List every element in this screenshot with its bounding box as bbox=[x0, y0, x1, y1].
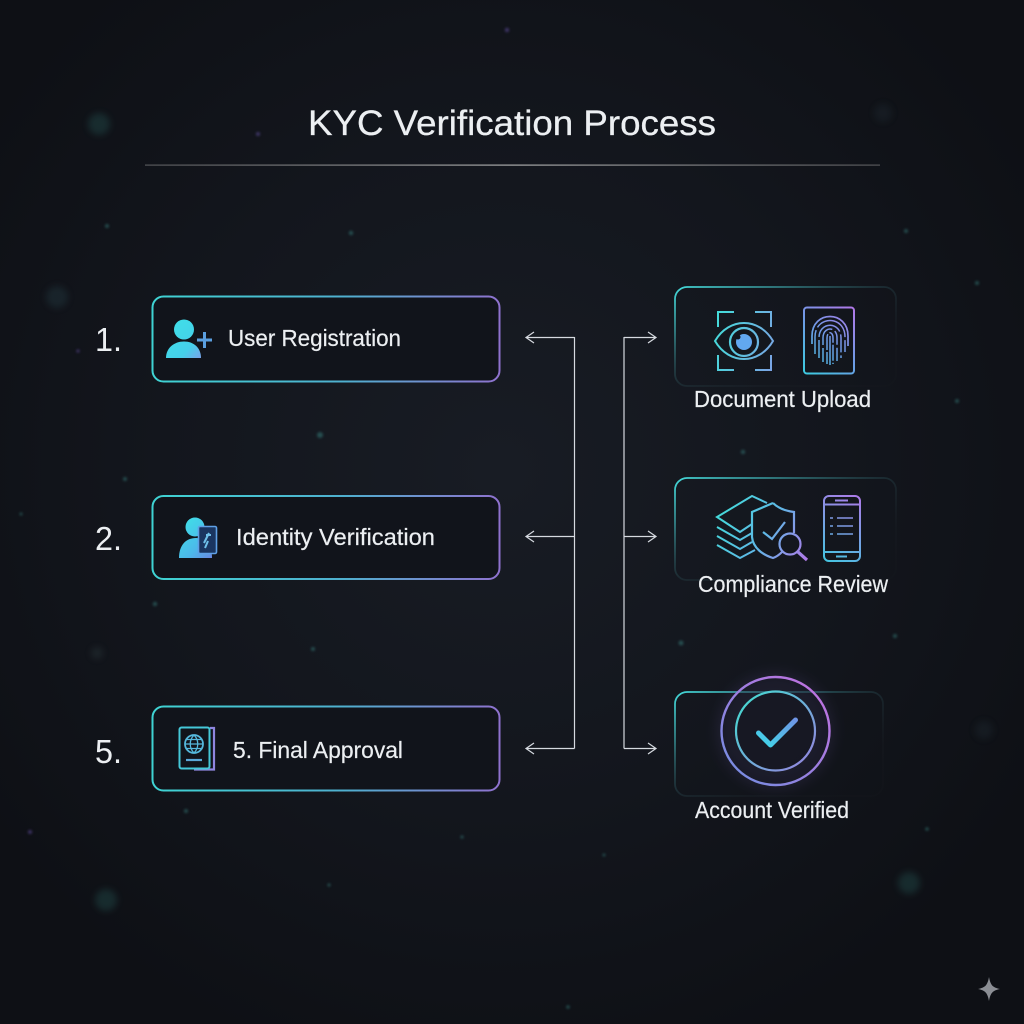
icon: phone bbox=[824, 496, 860, 561]
label: user registration: User Registration bbox=[228, 325, 401, 351]
icon: document stack bbox=[717, 496, 767, 558]
label: identity verification: Identity Verification bbox=[236, 524, 435, 550]
panel: identity verification bbox=[152, 496, 500, 579]
label: document upload: Document Upload bbox=[694, 386, 871, 412]
panel: user registration bbox=[152, 296, 500, 382]
arrows: right connector bbox=[624, 332, 656, 754]
step number 5: 5. bbox=[95, 733, 122, 770]
icon: identity card bbox=[179, 518, 216, 558]
panel: compliance review bbox=[675, 478, 896, 597]
panel: document upload bbox=[675, 287, 896, 412]
label: compliance review: Compliance Review bbox=[698, 571, 888, 597]
icon: sparkle watermark bbox=[978, 977, 1000, 1001]
icon: verified badge bbox=[718, 673, 834, 789]
step number 2: 2. bbox=[95, 520, 122, 557]
title: KYC Verification Process bbox=[308, 104, 716, 143]
title divider bbox=[145, 164, 880, 166]
panel: account verified bbox=[675, 673, 883, 823]
label: account verified: Account Verified bbox=[695, 797, 849, 823]
icon: shield with check and magnifier bbox=[752, 503, 807, 560]
icon: user plus bbox=[166, 320, 212, 358]
icon: eye scan bbox=[715, 312, 773, 370]
panel: final approval bbox=[152, 706, 500, 790]
icon: fingerprint tablet bbox=[804, 308, 854, 374]
arrows: left connector bbox=[526, 332, 574, 754]
step number 1: 1. bbox=[95, 321, 122, 358]
label: final approval: 5. Final Approval bbox=[233, 737, 403, 763]
icon: passport bbox=[180, 728, 214, 770]
